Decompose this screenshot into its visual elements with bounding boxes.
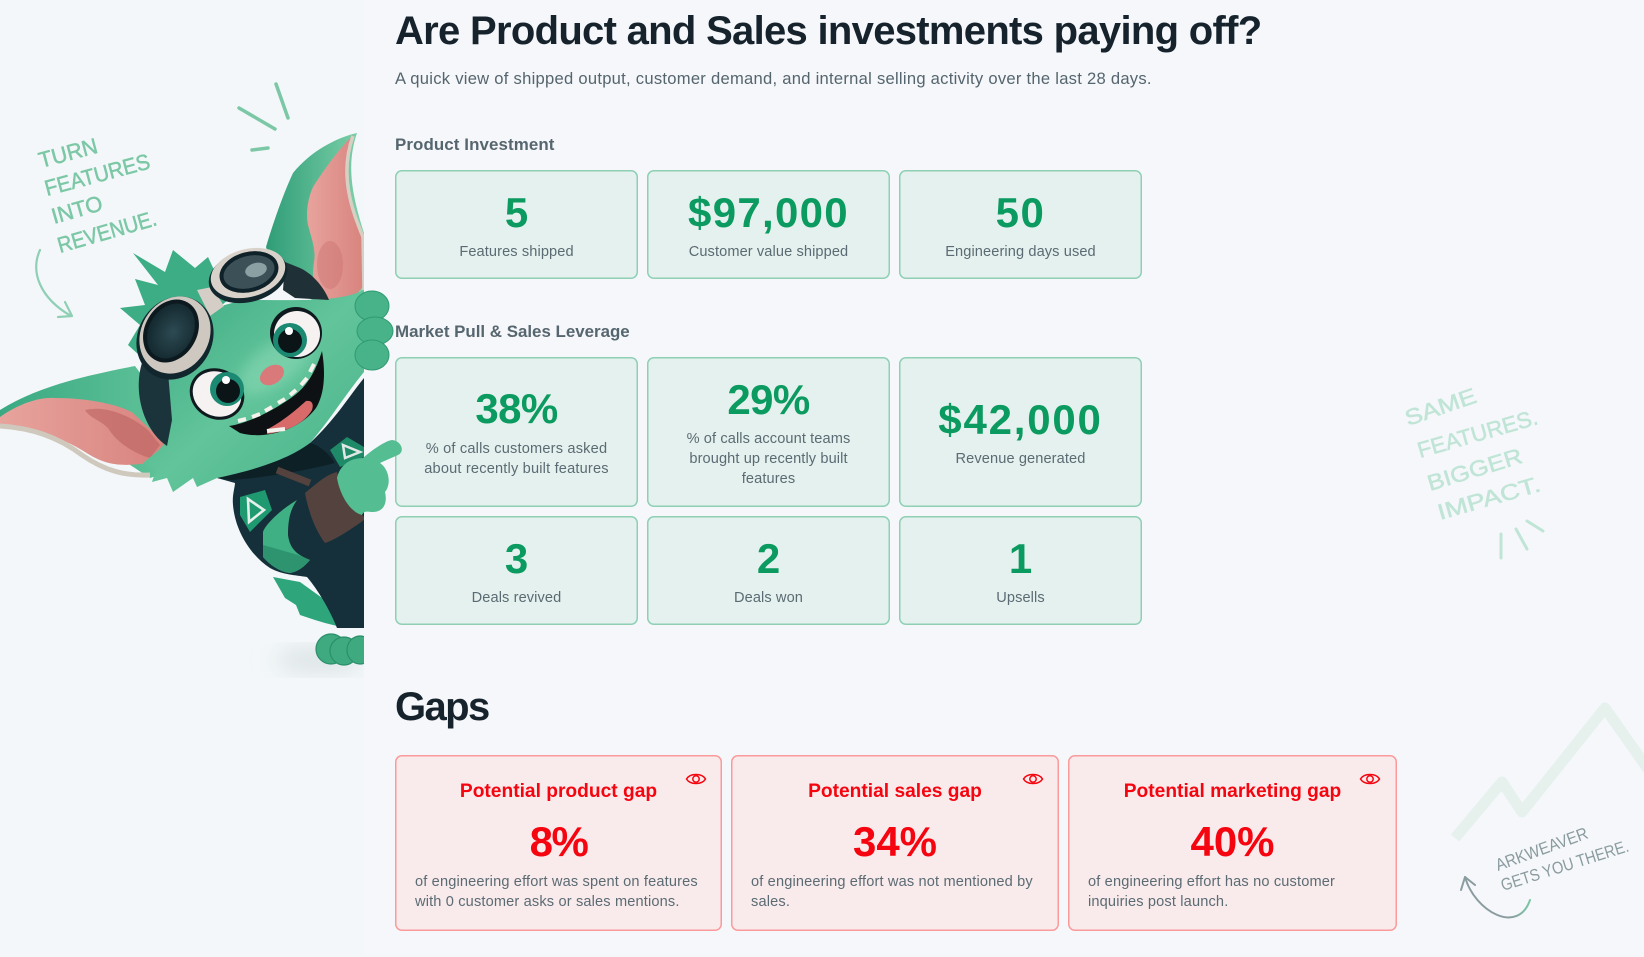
tail bbox=[273, 577, 336, 626]
icon: eye bbox=[1360, 774, 1380, 784]
faint rising line chart bbox=[1455, 708, 1644, 838]
head bbox=[143, 290, 364, 492]
card: calls customers asked bbox=[395, 357, 638, 507]
eye: right bbox=[270, 307, 322, 359]
card: potential product gap bbox=[395, 755, 722, 931]
body bbox=[217, 378, 364, 628]
gap description: of engineering effort has no customer bbox=[1088, 874, 1335, 890]
note: turn features into revenue bbox=[36, 133, 159, 258]
note: same features bigger impact: BIGGER bbox=[1424, 443, 1525, 496]
metric: 50 bbox=[996, 189, 1045, 236]
metric label: % of calls account teams bbox=[687, 430, 850, 446]
card: potential sales gap bbox=[731, 755, 1059, 931]
metric label: Features shipped bbox=[459, 244, 574, 260]
note: arkweaver gets you there: ARKWEAVER bbox=[1493, 824, 1591, 875]
mouth bbox=[229, 351, 324, 435]
metric label: Engineering days used bbox=[945, 244, 1096, 260]
subtitle: A quick view of shipped output, customer demand, and internal selling activity over the last 28 days. bbox=[395, 69, 1152, 88]
card: features shipped bbox=[395, 170, 638, 279]
note: same features bigger impact: SAME bbox=[1401, 383, 1480, 431]
note: turn features into revenue: TURN bbox=[36, 133, 100, 173]
gap description: inquiries post launch. bbox=[1088, 894, 1228, 910]
nose bbox=[260, 364, 284, 386]
metric: 2 bbox=[757, 535, 780, 582]
gap title: Potential sales gap bbox=[808, 780, 982, 802]
metric label bbox=[687, 430, 850, 487]
gap metric: 8% bbox=[530, 818, 587, 865]
metric label: Customer value shipped bbox=[689, 244, 848, 260]
metric label bbox=[424, 440, 609, 477]
gap description: sales. bbox=[751, 894, 790, 910]
lower ear bbox=[0, 366, 175, 478]
goggle strap right bbox=[283, 262, 329, 300]
metric label: Upsells bbox=[996, 590, 1045, 606]
gap description bbox=[1088, 874, 1335, 910]
goggle: lower bbox=[136, 296, 214, 380]
goggle strap left bbox=[139, 360, 172, 446]
title: Are Product and Sales investments paying off? bbox=[395, 9, 1261, 53]
card: potential marketing gap bbox=[1068, 755, 1397, 931]
heading: market pull and sales leverage: Market Pull & Sales Leverage bbox=[395, 322, 630, 341]
arrow: curved pointer up to chart bbox=[1461, 877, 1530, 917]
gap description bbox=[415, 874, 698, 910]
metric: 1 bbox=[1009, 535, 1032, 582]
card: revenue generated bbox=[899, 357, 1142, 507]
gap title: Potential product gap bbox=[460, 780, 657, 802]
accent rays above mascot bbox=[239, 84, 288, 150]
gap description: of engineering effort was spent on features bbox=[415, 874, 698, 890]
card: upsells bbox=[899, 516, 1142, 625]
accent rays under note bbox=[1501, 521, 1543, 558]
foot bbox=[316, 634, 373, 665]
muzzle highlight bbox=[238, 342, 311, 396]
mascot ground shadow bbox=[275, 651, 365, 669]
metric: 29% bbox=[727, 376, 810, 422]
gap description: with 0 customer asks or sales mentions. bbox=[415, 894, 680, 910]
gap description: of engineering effort was not mentioned by bbox=[751, 874, 1033, 890]
card: deals revived bbox=[395, 516, 638, 625]
note: turn features into revenue: INTO bbox=[48, 190, 105, 229]
icon: eye bbox=[686, 774, 706, 784]
metric: 38% bbox=[475, 385, 558, 432]
note: same features bigger impact: FEATURES. bbox=[1414, 405, 1541, 463]
note: same features bigger impact bbox=[1401, 383, 1543, 525]
note: turn features into revenue: FEATURES bbox=[42, 149, 153, 201]
hand: three gripping fingers bbox=[355, 291, 393, 370]
card: customer value shipped bbox=[647, 170, 890, 279]
upper ear bbox=[266, 133, 364, 312]
card: calls account teams brought up bbox=[647, 357, 890, 507]
metric label: % of calls customers asked bbox=[426, 440, 607, 456]
heading: product investment: Product Investment bbox=[395, 135, 554, 154]
icon: eye bbox=[1022, 774, 1044, 784]
left panel background tone bbox=[0, 0, 364, 957]
arrow: curved pointer to mascot bbox=[36, 250, 72, 317]
metric: 3 bbox=[505, 535, 528, 582]
card: deals won bbox=[647, 516, 890, 625]
hair tufts bbox=[120, 250, 226, 354]
gap metric: 40% bbox=[1190, 818, 1275, 865]
note: turn features into revenue: REVENUE. bbox=[54, 206, 159, 258]
eye: left bbox=[190, 368, 244, 420]
metric label: Revenue generated bbox=[956, 450, 1085, 466]
gap description bbox=[751, 874, 1033, 910]
mascot: green goblin with goggles bbox=[0, 133, 373, 669]
heading: gaps: Gaps bbox=[395, 685, 489, 729]
hand: pointing finger bbox=[337, 440, 402, 515]
metric: 5 bbox=[505, 189, 528, 236]
metric label: Deals revived bbox=[472, 590, 561, 606]
note: same features bigger impact: IMPACT. bbox=[1434, 472, 1543, 525]
metric label: brought up recently built bbox=[689, 451, 848, 467]
goggle: upper bbox=[208, 248, 287, 304]
card: engineering days used bbox=[899, 170, 1142, 279]
metric label: features bbox=[742, 471, 795, 487]
gap metric: 34% bbox=[853, 818, 937, 865]
metric label: about recently built features bbox=[424, 461, 609, 477]
metric: $97,000 bbox=[688, 189, 849, 236]
metric: $42,000 bbox=[938, 396, 1103, 443]
metric label: Deals won bbox=[734, 590, 803, 606]
gap title: Potential marketing gap bbox=[1124, 780, 1341, 802]
